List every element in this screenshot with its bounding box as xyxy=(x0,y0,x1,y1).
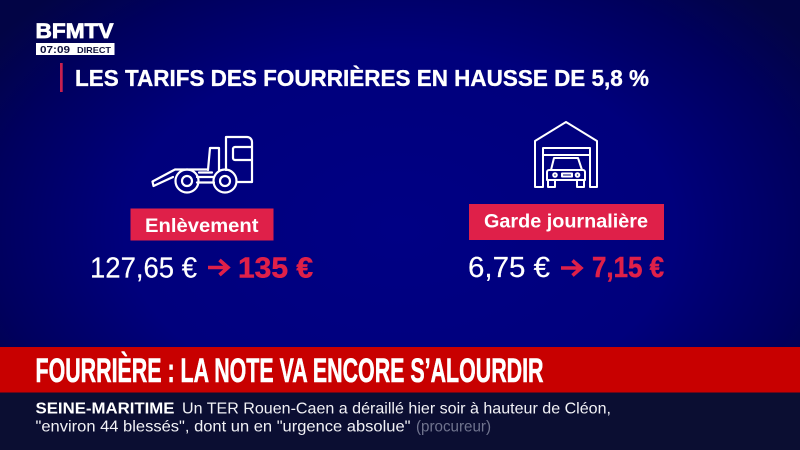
logo: BFMTV with clock: BFMTV xyxy=(36,19,114,43)
news ticker: Un TER Rouen-Caen a déraillé hier soir à hauteur de Cléon, xyxy=(182,400,611,418)
icon: garage with car xyxy=(535,122,597,187)
label: Enlèvement xyxy=(130,208,274,240)
panel: daily storage xyxy=(468,122,664,284)
label: Garde journalière xyxy=(469,204,664,240)
price: 127,65 to 135 euros xyxy=(90,252,313,284)
background xyxy=(0,0,800,350)
news ticker xyxy=(0,392,800,450)
logo: BFMTV with clock xyxy=(36,19,114,56)
news ticker: SEINE-MARITIME xyxy=(36,400,175,418)
price: 127,65 to 135 euros: 135 € xyxy=(238,252,313,284)
news ticker: (procureur) xyxy=(416,418,491,436)
price: 6,75 to 7,15 euros: 6,75 € xyxy=(468,252,550,284)
panel: removal xyxy=(90,137,313,284)
price: 6,75 to 7,15 euros: 7,15 € xyxy=(592,252,664,284)
heading: tariffs up 5.8%: LES TARIFS DES FOURRIÈRES EN HAUSSE DE 5,8 % xyxy=(75,64,649,91)
icon: tow truck xyxy=(152,137,252,192)
logo: BFMTV with clock: DIRECT xyxy=(77,45,112,55)
logo: BFMTV with clock: 07:09 xyxy=(40,45,71,56)
label: Garde journalière: Garde journalière xyxy=(484,212,648,232)
label: Enlèvement: Enlèvement xyxy=(145,216,259,237)
news ticker: "environ 44 blessés", dont un en "urgence absolue" xyxy=(36,418,410,436)
price: 127,65 to 135 euros: 127,65 € xyxy=(90,252,197,284)
price: 6,75 to 7,15 euros xyxy=(468,252,664,284)
